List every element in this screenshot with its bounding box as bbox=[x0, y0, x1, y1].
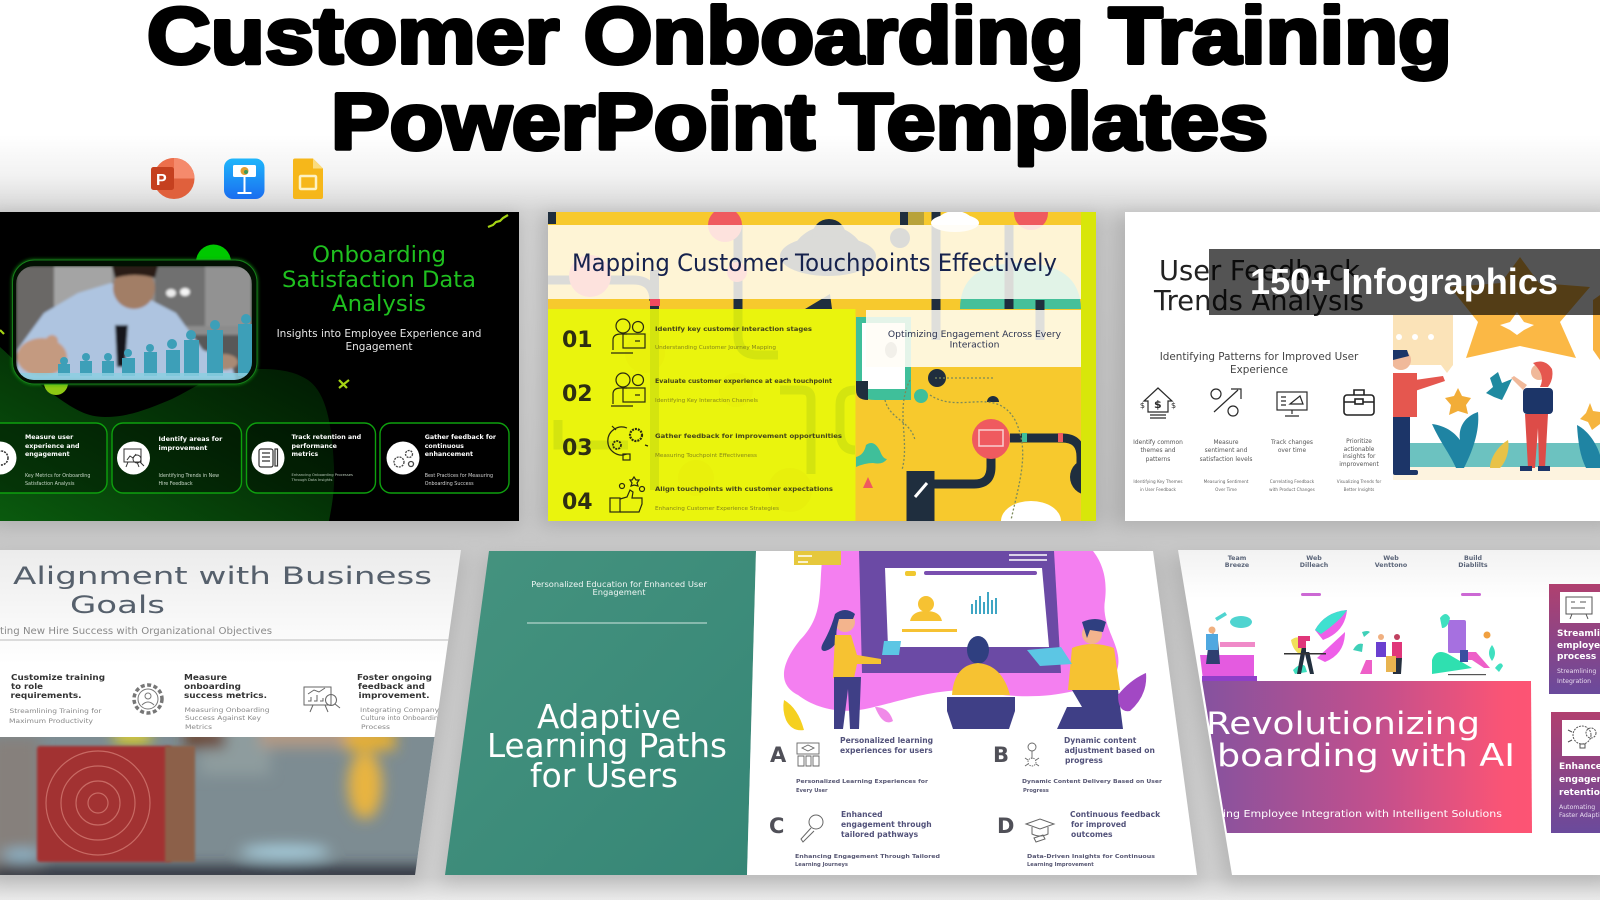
item: customize training bbox=[9, 673, 105, 725]
team labels: Build bbox=[1464, 555, 1482, 562]
column: changes over time: Track changes bbox=[1270, 440, 1313, 446]
pipe map background bbox=[548, 212, 1081, 490]
subtitle: ing Employee Integration with Intelligent Solutions bbox=[1223, 809, 1502, 820]
list headings: Evaluate customer experience at each touchpoint bbox=[655, 377, 832, 385]
card: streamline process bbox=[1549, 584, 1600, 694]
item A: experiences for users bbox=[840, 746, 933, 755]
title: PowerPoint Templates bbox=[331, 77, 1268, 166]
heading: boarding with AI bbox=[1217, 738, 1515, 774]
column: common themes: Identify common bbox=[1133, 440, 1183, 446]
heading: Goals bbox=[70, 591, 165, 619]
icon: presentation chart bbox=[304, 687, 340, 712]
card: track retention bbox=[246, 423, 376, 493]
item B: progress bbox=[1065, 756, 1103, 765]
card: gather feedback: Onboarding Success bbox=[425, 481, 474, 487]
item D: outcomes bbox=[1071, 830, 1113, 839]
team labels: Dilleach bbox=[1300, 562, 1328, 569]
card: measure user experience: Measure user bbox=[25, 434, 74, 441]
woman bbox=[1531, 365, 1542, 380]
icon: house dollar: $ bbox=[1171, 401, 1176, 410]
item: customize training: Streamlining Training for bbox=[10, 708, 102, 715]
photo: red target block bbox=[0, 725, 470, 884]
numbers: 03 bbox=[562, 436, 593, 461]
icon: house dollar: $ bbox=[1154, 398, 1162, 411]
item D: for improved bbox=[1071, 820, 1126, 829]
green circle bbox=[196, 244, 231, 260]
heading: Onboarding bbox=[312, 243, 446, 268]
team labels bbox=[1225, 555, 1488, 569]
card: track retention: Track retention and bbox=[292, 434, 361, 441]
card: track retention: metrics bbox=[292, 451, 318, 458]
list descriptions: Enhancing Customer Experience Strategies bbox=[655, 506, 779, 512]
card: streamline process: process bbox=[1557, 652, 1596, 662]
item B: Dynamic content bbox=[1064, 736, 1137, 745]
banner: 150+ infographics: 150+ Infographics bbox=[1250, 261, 1558, 302]
icon: rising arrow bbox=[1211, 389, 1241, 416]
item: foster feedback: feedback and bbox=[358, 682, 425, 691]
list headings: Identify key customer interaction stages bbox=[655, 325, 812, 333]
item: customize training: requirements. bbox=[10, 691, 82, 700]
item A: Every User bbox=[796, 788, 828, 794]
subtitle bbox=[277, 328, 481, 353]
white right side bbox=[747, 551, 1197, 875]
item B: Progress bbox=[1023, 788, 1049, 794]
item: measure onboarding bbox=[184, 673, 270, 731]
card: gather feedback: Gather feedback for bbox=[425, 434, 497, 441]
subtitle: Engagement bbox=[346, 341, 412, 353]
list descriptions: Measuring Touchpoint Effectiveness bbox=[655, 453, 757, 459]
card: gather feedback: enhancement bbox=[425, 451, 473, 458]
tagline bbox=[531, 579, 707, 597]
icon: PowerPoint bbox=[151, 158, 194, 199]
icon: briefcase bbox=[1344, 390, 1374, 415]
list headings: Gather feedback for improvement opportunities bbox=[655, 432, 842, 440]
item A: A bbox=[770, 743, 787, 767]
item B: Dynamic Content Delivery Based on User bbox=[1022, 779, 1162, 785]
card: track retention: performance bbox=[292, 443, 337, 450]
team labels: Breeze bbox=[1225, 562, 1249, 569]
numbers: 04 bbox=[562, 490, 593, 515]
item: foster feedback bbox=[357, 673, 443, 731]
subtitle: Insights into Employee Experience and bbox=[277, 328, 481, 340]
icon: Google Slides bbox=[293, 158, 323, 199]
item: measure onboarding: Success Against Key bbox=[185, 715, 261, 722]
card: track retention: Enhancing Onboarding Processes bbox=[292, 473, 353, 477]
column: actionable insights bbox=[1337, 439, 1381, 492]
subtitle: Experience bbox=[1230, 364, 1288, 376]
woman figure bbox=[835, 612, 855, 632]
item D bbox=[997, 810, 1161, 868]
lime striped circle bbox=[44, 384, 68, 395]
subtitle: ting New Hire Success with Organizational Objectives bbox=[0, 626, 272, 637]
item: measure onboarding: success metrics. bbox=[184, 691, 267, 700]
item A: Personalized learning bbox=[840, 736, 933, 745]
card: gather feedback bbox=[380, 423, 509, 493]
item: foster feedback: Culture into Onboarding bbox=[360, 715, 443, 722]
heading: Revolutionizing bbox=[1206, 706, 1480, 742]
item C: engagement through bbox=[841, 820, 932, 829]
item: foster feedback: Integrating Company bbox=[360, 707, 439, 714]
pipeline with monitor node bbox=[856, 369, 1106, 521]
icon: thumbs up stars bbox=[610, 477, 644, 512]
column: common themes: themes and bbox=[1140, 448, 1176, 454]
banner: 150+ infographics bbox=[1209, 249, 1600, 315]
right callout band bbox=[866, 310, 1081, 367]
column: actionable insights: actionable bbox=[1344, 447, 1375, 453]
column: common themes bbox=[1133, 440, 1183, 492]
heading: for Users bbox=[530, 756, 678, 795]
card: enhance engagement: Automating bbox=[1559, 804, 1595, 811]
card: identify areas: Identify areas for bbox=[158, 435, 223, 443]
heading: Mapping Customer Touchpoints Effectively bbox=[572, 249, 1057, 277]
column: changes over time: over time bbox=[1278, 448, 1307, 454]
list descriptions bbox=[655, 345, 779, 512]
left list backdrop bbox=[548, 309, 856, 521]
column: actionable insights: insights for bbox=[1343, 454, 1376, 460]
item A: Personalized Learning Experiences for bbox=[796, 779, 929, 785]
icon: monitor megaphone bbox=[1277, 392, 1307, 416]
item C: Enhanced bbox=[841, 810, 883, 819]
standing man with laptop bbox=[1082, 624, 1102, 644]
team labels: Team bbox=[1228, 555, 1247, 562]
card: identify areas bbox=[112, 423, 242, 493]
photo frame bbox=[12, 260, 257, 384]
team labels: Web bbox=[1383, 555, 1399, 562]
card: identify areas: Hire Feedback bbox=[158, 481, 193, 487]
panel: user feedback trends analysis bbox=[1125, 212, 1600, 521]
icon: house dollar bbox=[1140, 388, 1176, 418]
item A bbox=[770, 736, 933, 794]
tagline: Personalized Education for Enhanced User bbox=[531, 579, 707, 589]
item: measure onboarding: Metrics bbox=[185, 724, 212, 731]
heading: Trends Analysis bbox=[1153, 284, 1364, 317]
item C: C bbox=[769, 814, 784, 838]
column: sentiment: Over Time bbox=[1215, 487, 1237, 492]
right sliver bbox=[1081, 212, 1096, 521]
heading: Learning Paths bbox=[487, 726, 727, 765]
panel: onboarding satisfaction data analysis bbox=[0, 212, 519, 521]
item B: B bbox=[993, 743, 1009, 767]
icon: agent 2 bbox=[611, 373, 645, 406]
icon: house dollar: $ bbox=[1140, 401, 1145, 410]
illustration: four team scenes bbox=[1200, 593, 1503, 680]
card: streamline process: Integration bbox=[1557, 678, 1591, 685]
numbers: 01 bbox=[562, 328, 593, 353]
card: measure user experience: experience and bbox=[25, 443, 80, 450]
item B: adjustment based on bbox=[1064, 746, 1155, 755]
column: sentiment: Measuring Sentiment bbox=[1204, 479, 1249, 484]
card: gather feedback: continuous bbox=[425, 443, 464, 450]
card: track retention: Through Data Insights bbox=[290, 478, 332, 482]
item: measure onboarding: onboarding bbox=[184, 682, 241, 691]
item D: D bbox=[997, 814, 1014, 838]
panel: adaptive learning paths bbox=[445, 551, 1197, 875]
item C: Enhancing Engagement Through Tailored bbox=[795, 854, 940, 860]
numbers bbox=[562, 328, 593, 515]
item: foster feedback: Foster ongoing bbox=[357, 673, 432, 682]
card: enhance engagement bbox=[1551, 712, 1600, 833]
panel: revolutionizing onboarding with AI bbox=[1170, 550, 1600, 875]
card: measure user experience: Key Metrics for Onboarding bbox=[25, 473, 90, 479]
callout text: Optimizing Engagement Across Every bbox=[888, 329, 1062, 340]
column: common themes: patterns bbox=[1146, 457, 1170, 463]
photo: man arranging growth chart bbox=[16, 266, 254, 380]
card: streamline process: Streamlining bbox=[1557, 668, 1596, 675]
man bbox=[1393, 373, 1417, 417]
subtitle: Identifying Patterns for Improved User bbox=[1160, 351, 1359, 363]
gradient banner bbox=[1202, 681, 1532, 833]
item: foster feedback: Process bbox=[361, 724, 390, 731]
heading bbox=[1206, 706, 1515, 774]
heading: Alignment with Business bbox=[13, 562, 432, 590]
item: customize training: Customize training bbox=[11, 673, 105, 682]
column: sentiment bbox=[1200, 440, 1252, 492]
list descriptions: Identifying Key Interaction Channels bbox=[655, 398, 758, 404]
icon: gear person bbox=[134, 685, 162, 713]
column: changes over time: with Product Changes bbox=[1269, 487, 1315, 492]
column: sentiment: satisfaction levels bbox=[1200, 457, 1252, 463]
card: identify areas: improvement bbox=[158, 444, 207, 452]
illustration: stars and people bbox=[1391, 257, 1600, 480]
title bbox=[147, 0, 1452, 166]
list headings: Align touchpoints with customer expectations bbox=[655, 485, 833, 493]
lime accents bbox=[0, 215, 508, 388]
item: foster feedback: improvement. bbox=[358, 691, 430, 700]
leaves bbox=[783, 700, 804, 730]
column: actionable insights: improvement bbox=[1339, 462, 1379, 468]
icon: PowerPoint: P bbox=[156, 172, 167, 189]
callout text: Interaction bbox=[950, 340, 1000, 350]
item: customize training: Maximum Productivity bbox=[9, 718, 93, 725]
green blob background bbox=[0, 347, 334, 521]
heading bbox=[487, 697, 727, 795]
heading: User Feedback bbox=[1159, 254, 1361, 287]
team labels: Venttono bbox=[1375, 562, 1408, 569]
column: changes over time: Correlating Feedback bbox=[1270, 479, 1315, 484]
panel: mapping customer touchpoints bbox=[548, 196, 1106, 521]
title band bbox=[548, 225, 1081, 299]
item C: tailored pathways bbox=[841, 830, 919, 839]
heading bbox=[13, 562, 432, 619]
column: changes over time bbox=[1269, 440, 1315, 492]
numbers: 02 bbox=[562, 382, 593, 407]
card: measure user experience: Satisfaction Analysis bbox=[25, 481, 75, 487]
column: actionable insights: Prioritize bbox=[1346, 439, 1372, 445]
panel shadows bbox=[0, 214, 1600, 882]
card: measure user experience bbox=[0, 423, 107, 493]
illustration: team at screen bbox=[783, 551, 1146, 730]
item D: Continuous feedback bbox=[1070, 810, 1161, 819]
subtitle bbox=[1160, 351, 1359, 376]
item: measure onboarding: Measuring Onboarding bbox=[184, 707, 270, 714]
item: measure onboarding: Measure bbox=[184, 673, 227, 682]
icon: agent 1 bbox=[611, 319, 645, 353]
column: common themes: in User Feedback bbox=[1140, 487, 1177, 492]
card: identify areas: Identifying Trends in New bbox=[158, 473, 219, 479]
team labels: Diablilts bbox=[1458, 562, 1488, 569]
icon: lightbulb gear bbox=[608, 426, 648, 460]
list descriptions: Understanding Customer Journey Mapping bbox=[655, 345, 776, 351]
heading bbox=[1154, 259, 1363, 316]
heading: Adaptive bbox=[537, 697, 681, 736]
phone illustration bbox=[856, 317, 928, 403]
heading bbox=[282, 243, 476, 317]
tagline: Engagement bbox=[593, 587, 646, 597]
seated man figure bbox=[967, 636, 989, 664]
heading: Analysis bbox=[332, 292, 426, 317]
column: actionable insights: Better Insights bbox=[1344, 487, 1374, 492]
card: gather feedback: Best Practices for Measuring bbox=[425, 473, 493, 479]
column: common themes: Identifying Key Themes bbox=[1133, 479, 1183, 484]
icon: Keynote bbox=[224, 158, 264, 199]
item C bbox=[769, 810, 940, 868]
column: sentiment: sentiment and bbox=[1205, 448, 1248, 454]
panel: alignment with business goals bbox=[0, 550, 470, 884]
item C: Learning Journeys bbox=[795, 862, 848, 868]
column: actionable insights: Visualizing Trends for bbox=[1337, 479, 1381, 484]
item B bbox=[993, 736, 1162, 794]
heading: Satisfaction Data bbox=[282, 268, 476, 293]
item: customize training: to role bbox=[11, 682, 43, 691]
item D: Data-Driven Insights for Continuous bbox=[1027, 854, 1155, 860]
callout text bbox=[888, 330, 1061, 348]
list headings bbox=[655, 325, 842, 493]
card: measure user experience: engagement bbox=[25, 451, 70, 458]
column: sentiment: Measure bbox=[1213, 440, 1239, 446]
teal left side bbox=[445, 551, 756, 875]
team labels: Web bbox=[1306, 555, 1322, 562]
item D: Learning Improvement bbox=[1027, 862, 1094, 868]
